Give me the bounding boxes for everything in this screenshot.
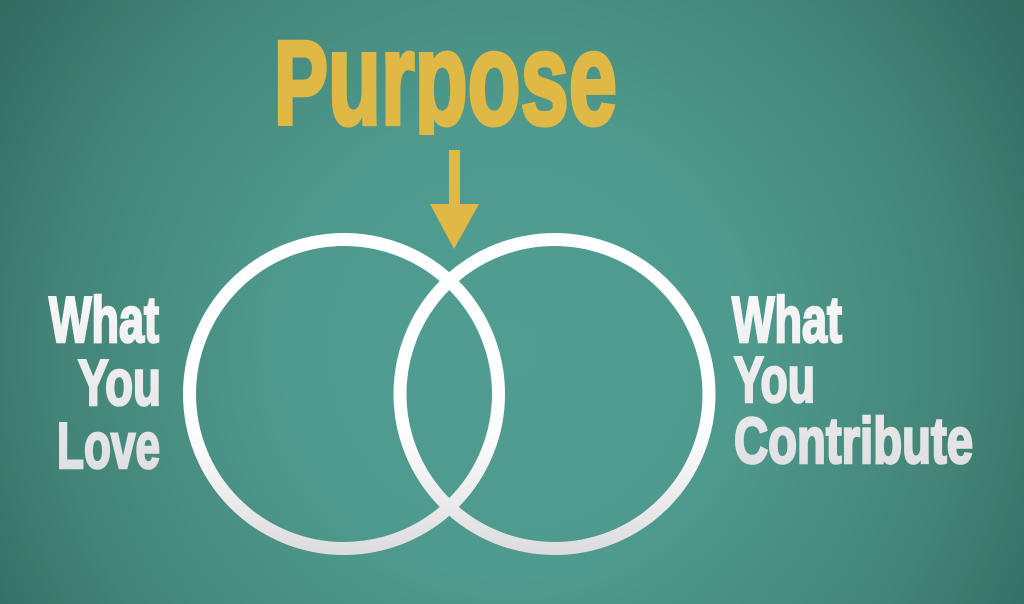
title: Purpose <box>278 40 616 135</box>
left label: What You Love: You <box>78 346 161 419</box>
right label: What You Contribute: What <box>732 283 842 356</box>
left label: What You Love <box>49 283 161 482</box>
title: Purpose: urpose <box>328 5 617 152</box>
title: Purpose: P <box>274 17 328 150</box>
venn diagram <box>190 240 709 548</box>
right circle <box>400 240 709 548</box>
right label: What You Contribute <box>732 283 973 477</box>
left circle <box>190 240 498 548</box>
left label: What You Love: What <box>49 283 159 356</box>
arrow: from title to circle overlap <box>430 150 479 249</box>
left label: What You Love: Love <box>57 409 160 482</box>
right label: What You Contribute: You <box>734 343 815 416</box>
